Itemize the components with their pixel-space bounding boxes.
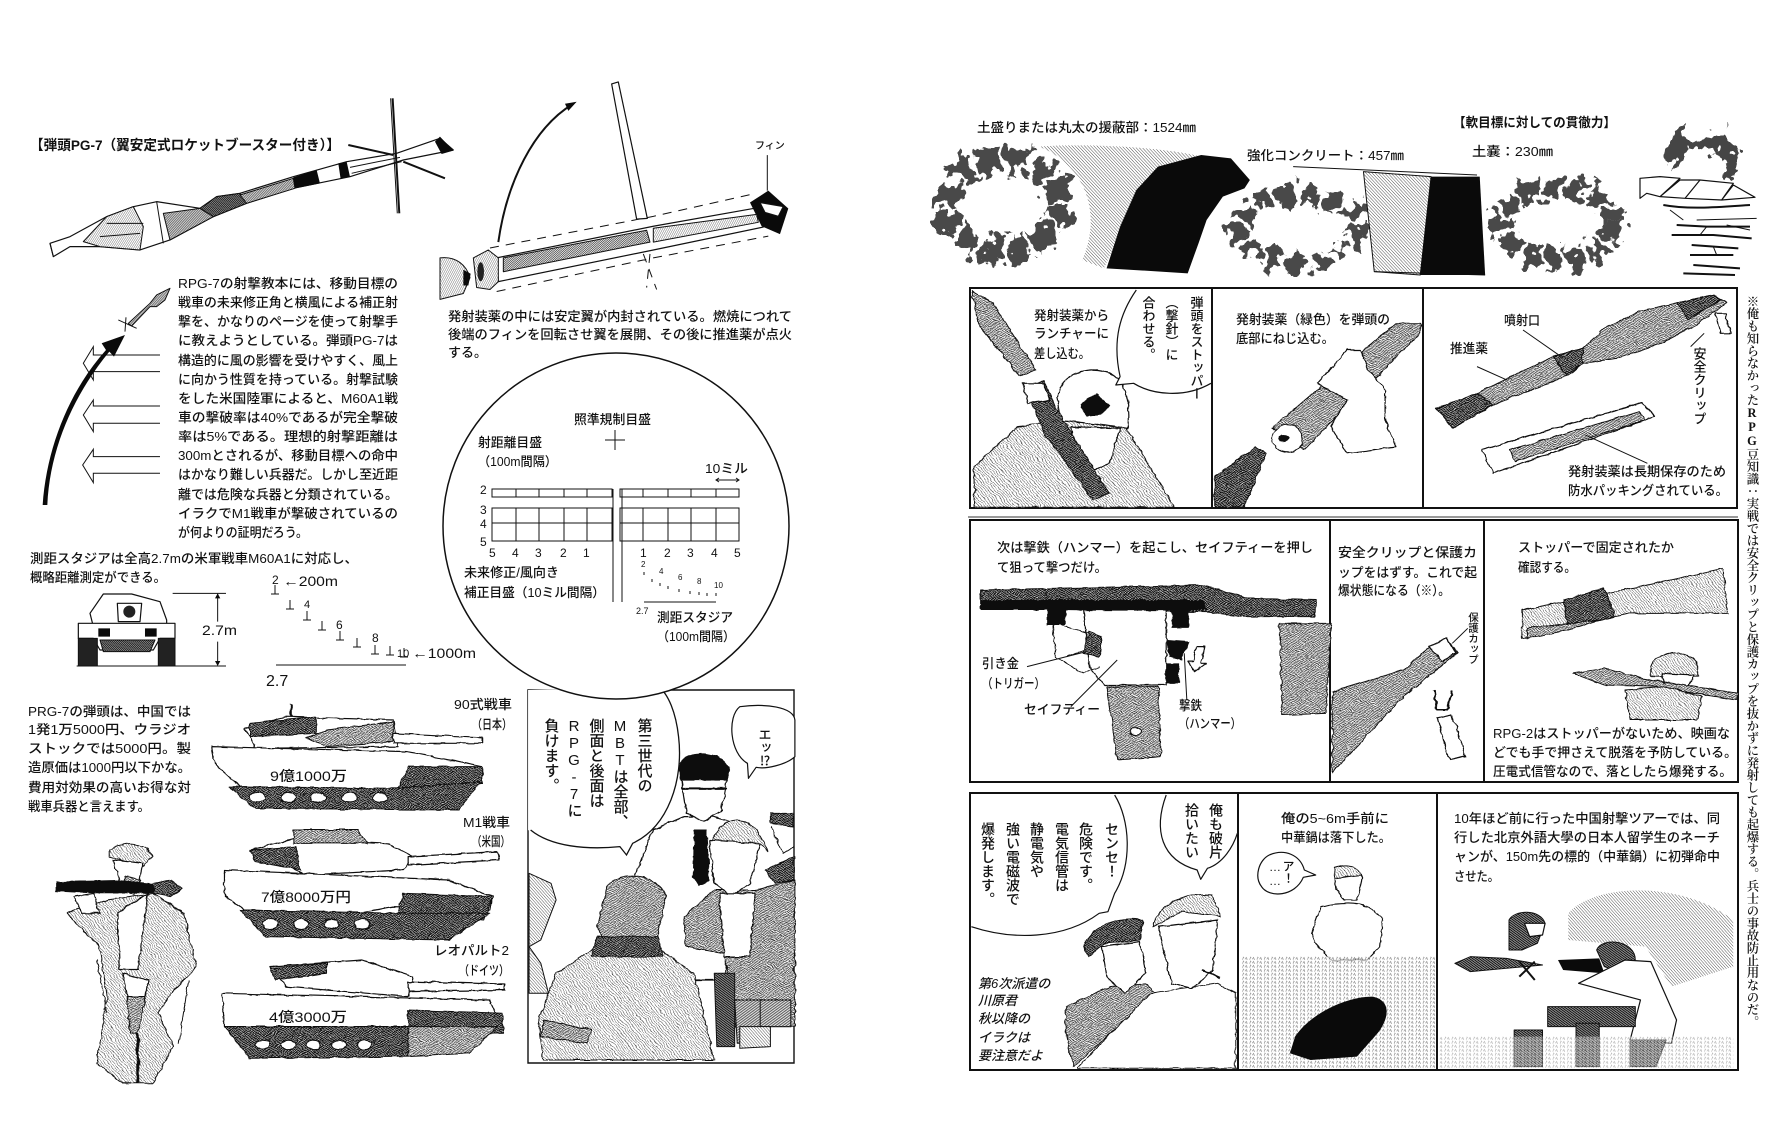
caption: wok fell: 俺の5~6m手前に	[1281, 811, 1389, 826]
labels: trigger group: （トリガー）	[982, 676, 1045, 691]
caption: shooting tour: ャンが、150m先の標的（中華鍋）に初弾命中	[1454, 849, 1720, 864]
label: Leopard 2: レオパルト2	[434, 943, 509, 958]
objects: bottles on the table	[714, 973, 791, 1048]
text block: propellant	[448, 309, 792, 360]
illustration: Leopard 2 tank	[222, 960, 505, 1058]
handwritten note: イラクは	[978, 1030, 1031, 1045]
caption: insert into launcher: 差し込む。	[1034, 346, 1090, 361]
panel row 3: comic anecdotes	[970, 793, 1738, 1070]
label: M1: M1戦車	[463, 815, 510, 830]
handwritten note: 秋以降の	[978, 1011, 1031, 1026]
chart: reinforced concrete penetration: 強化コンクリート：457㎜	[1247, 148, 1404, 163]
figure: bald man from behind	[538, 876, 714, 1060]
text block: firing manual: 構造的に風の影響を受けやすく、風上	[178, 353, 398, 368]
speech bubble: stopper	[1116, 290, 1211, 393]
diagram: sight reticle: 未来修正/風向き	[464, 565, 559, 580]
caption: screw in propellant: 底部にねじ込む。	[1236, 331, 1334, 346]
figure: soldier loading warhead	[971, 291, 1174, 507]
diagram: sight reticle: 2	[560, 546, 567, 560]
text block: propellant: 後端のフィンを回転させ翼を展開、その後に推進薬が点火	[448, 327, 792, 342]
handwritten note: 川原君	[978, 993, 1019, 1008]
diagram: sight reticle: 10ミル	[705, 461, 748, 476]
diagram: stadia scale	[266, 573, 476, 690]
figure: rocket and propellant sleeve	[1436, 295, 1731, 473]
figure: tube and hand	[1215, 323, 1420, 507]
labels: trigger group: （ハンマー）	[1179, 716, 1241, 731]
diagram: sight reticle: 4	[512, 546, 519, 560]
labels: trigger group: セイフティー	[1024, 702, 1100, 717]
figure: man in grass	[1312, 866, 1383, 960]
bubble text: fragment: 俺も破片	[1208, 803, 1224, 860]
label: Type 90: 90式戦車	[454, 697, 512, 712]
illustration: fighter with RPG	[56, 844, 196, 1083]
figure: man with glasses	[635, 753, 745, 980]
caption: waterproof packing: 防水パッキングされている。	[1568, 483, 1728, 498]
text block: stadia explanation	[30, 551, 358, 585]
diagram: sight reticle: 補正目盛（10ミル間隔）	[464, 585, 605, 600]
text block: stadia explanation: 測距スタジアは全高2.7mの米軍戦車M60A1に対応し、	[30, 551, 358, 566]
caption: wok fell: 中華鍋は落下した。	[1281, 830, 1391, 845]
side note: vertical trivia: ※俺も知らなかったRPG豆知識：実戦では安全クリップと保護カップを抜かずに発射しても起爆する。兵士の事故防止用なのだ。	[1745, 295, 1760, 1028]
diagram: sight reticle: 5	[480, 535, 487, 549]
diagram: sight reticle: 1	[640, 546, 647, 560]
bubble text: third-generation MBT: 負けます。	[542, 718, 560, 793]
text block: warhead price: 戦車兵器と言えます。	[28, 799, 150, 814]
chart: earth berm penetration	[947, 120, 1250, 273]
text block: firing manual: が何よりの証明だろう。	[178, 525, 308, 540]
text block: firing manual: 撃を、かなりのページを使って射撃手	[178, 314, 398, 329]
bubble text: danger warning: 危険です。	[1078, 822, 1094, 892]
speech bubble: ah	[1258, 852, 1316, 894]
text block: warhead price: PRG-7の弾頭は、中国では	[28, 704, 191, 719]
label: tank height: 2.7m	[202, 622, 237, 638]
caption: screw in propellant: 発射装薬（緑色）を弾頭の	[1236, 312, 1390, 327]
chart: reinforced concrete penetration	[1238, 148, 1485, 275]
labels: rocket parts: 推進薬	[1450, 341, 1488, 356]
label: Leopard 2 price: 4億3000万	[269, 1009, 347, 1025]
bubble text: fragment: 拾いたい	[1184, 803, 1200, 859]
caption: waterproof packing	[1568, 464, 1728, 498]
caption: remove clip and cap: 爆状態になる（※）。	[1338, 583, 1450, 598]
caption: cock hammer	[997, 540, 1313, 575]
label: Type 90 price: 9億1000万	[270, 768, 347, 784]
bubble text: align with stopper: （撃針）に	[1164, 296, 1178, 361]
text block: firing manual: 離では危険な兵器と分類されている。	[178, 487, 398, 502]
speech bubble: want a fragment	[1160, 795, 1237, 879]
label: Leopard 2	[434, 943, 509, 978]
diagram: sight reticle: 8	[697, 577, 702, 586]
diagram: sight reticle: 6	[678, 573, 683, 582]
handwritten note	[978, 976, 1051, 1063]
illustration: propellant tube and fins	[440, 82, 788, 299]
bubble text: third-generation MBT: 側面と後面は	[588, 718, 604, 808]
figures: two men	[1066, 895, 1236, 1068]
bubble text: danger warning	[980, 821, 1120, 906]
illustration: M1 tank	[224, 830, 499, 940]
text block: firing manual: RPG-7の射撃教本には、移動目標の	[178, 276, 398, 291]
label: M1: （米国）	[472, 834, 510, 849]
diagram: sight reticle: 2.7	[636, 606, 649, 616]
caption: confirm stopper: ストッパーで固定されたか	[1518, 540, 1674, 555]
chart: sandbag penetration	[1472, 125, 1757, 275]
illustration: PG-7 rocket	[50, 98, 453, 257]
caption: cock hammer: 次は撃鉄（ハンマー）を起こし、セイフティーを押し	[997, 540, 1313, 555]
caption: RPG-2 note: RPG-2はストッパーがないため、映画な	[1493, 726, 1730, 741]
bubble text: third-generation MBT	[542, 717, 652, 829]
illustration: Type 90 tank	[212, 703, 482, 810]
caption: screw in propellant	[1236, 312, 1390, 346]
text block: firing manual: をした米国陸軍によると、M60A1戦	[178, 391, 398, 406]
text block: firing manual: はかなり難しい兵器だ。しかし至近距	[178, 467, 398, 482]
text block: stadia explanation: 概略距離測定ができる。	[30, 570, 166, 585]
diagram: sight reticle: 射距離目盛	[478, 435, 542, 450]
diagram: sight reticle: （100m間隔）	[657, 629, 735, 644]
diagram: stadia scale: ←1000m	[412, 645, 476, 661]
illustration: propellant tube and fins: フィン	[755, 140, 785, 152]
bubble text: third-generation MBT: RPG-7に	[566, 718, 582, 818]
heading: soft target penetration: 【軟目標に対しての貫徹力】	[1453, 115, 1616, 130]
labels: rocket parts	[1450, 313, 1706, 425]
speech bubble: surprise	[732, 705, 795, 778]
text block: warhead price: 費用対効果の高いお得な対	[28, 780, 191, 795]
diagram: stadia scale: 6	[336, 618, 343, 632]
caption: insert into launcher	[1034, 308, 1109, 361]
text block: warhead price: 造原価は1000円以下かな。	[28, 760, 191, 775]
diagram: sight reticle: 3	[687, 546, 694, 560]
text block: firing manual: 戦車の未来修正角と横風による補正射	[178, 295, 398, 310]
caption: shooting tour: 10年ほど前に行った中国射撃ツアーでは、同	[1454, 811, 1720, 826]
diagram: stadia scale: ←200m	[283, 573, 338, 589]
label: protective cap: 保護カップ	[1467, 611, 1479, 664]
text block: propellant: 発射装薬の中には安定翼が内封されている。燃焼につれて	[448, 309, 792, 324]
illustration: stopper check and soldier	[1522, 568, 1738, 720]
text block: warhead price: ストックでは5000円。製	[28, 741, 191, 756]
label: Leopard 2: （ドイツ）	[459, 963, 509, 978]
diagram: stadia scale: 8	[372, 631, 379, 645]
bubble text: fragment	[1184, 803, 1224, 860]
bubble text: align with stopper	[1140, 295, 1204, 400]
handwritten note: 要注意だよ	[978, 1048, 1043, 1063]
caption: shooting tour: させた。	[1454, 869, 1499, 884]
text block: firing manual: に向かう性質を持っている。射撃試験	[178, 372, 398, 387]
illustration: trigger group	[981, 585, 1331, 760]
diagram: sight reticle: 3	[535, 546, 542, 560]
text block: firing manual: イラクでM1戦車が撃破されているの	[178, 506, 398, 521]
labels: trigger group: 引き金	[982, 656, 1019, 671]
diagram: sight reticle: 5	[489, 546, 496, 560]
caption: wok fell	[1281, 811, 1391, 845]
caption: remove clip and cap	[1338, 545, 1477, 598]
text block: firing manual: 300mとされるが、移動目標への命中	[178, 448, 398, 463]
bubble text: ah: ……	[1268, 860, 1282, 888]
label: M1 price: 7億8000万円	[261, 889, 351, 905]
caption: cock hammer: て狙って撃つだけ。	[997, 560, 1107, 575]
diagram: sight reticle: 照準規制目盛	[574, 412, 651, 427]
figure: man in cap	[684, 813, 795, 1027]
speech bubble: danger warning	[971, 795, 1127, 935]
diagram: sight reticle: 測距スタジア	[657, 610, 733, 625]
caption: RPG-2 note: どでも手で押さえて脱落を予防している。	[1493, 745, 1737, 760]
text block: warhead price: 1発1万5000円、ウラジオ	[28, 722, 191, 737]
bubble text: ah	[1268, 860, 1295, 888]
text block: firing manual: に教えようとしている。弾頭PG-7は	[178, 333, 398, 348]
chart: earth berm penetration: 土盛りまたは丸太の援蔽部：1524㎜	[977, 120, 1196, 135]
chart: sandbag penetration: 土嚢：230㎜	[1472, 144, 1553, 159]
diagram: stadia scale: 2	[272, 573, 279, 587]
caption: remove clip and cap: ップをはずす。これで起	[1338, 565, 1477, 580]
text block: firing manual: 車の撃破率は40%であるが完全撃破	[178, 410, 398, 425]
illustration: M60A1 tank with height	[77, 593, 226, 666]
diagram: sight reticle: 2	[641, 560, 646, 569]
illustration: sandbag wall	[1640, 177, 1757, 275]
caption: insert into launcher: ランチャーに	[1034, 326, 1109, 341]
diagram: sight reticle: 2	[480, 483, 487, 497]
bubble text: align with stopper: 弾頭をストッパー	[1188, 295, 1204, 400]
bubble text: third-generation MBT: MBTは全部、	[612, 718, 628, 829]
caption: waterproof packing: 発射装薬は長期保存のため	[1568, 464, 1726, 479]
bubble text: danger warning: 強い電磁波で	[1005, 822, 1021, 906]
diagram: stadia scale: 10	[397, 648, 409, 660]
illustration: protective cap	[1332, 638, 1465, 773]
bubble text: ah: ア！	[1281, 860, 1295, 884]
panel row 2: firing steps	[968, 516, 1738, 782]
labels: rocket parts: 安全クリップ	[1692, 346, 1706, 425]
caption: insert into launcher: 発射装薬から	[1034, 308, 1109, 323]
labels: rocket parts: 噴射口	[1504, 313, 1540, 328]
diagram: sight reticle: 4	[480, 517, 487, 531]
bubble text: danger warning: センセ！	[1104, 822, 1120, 878]
diagram: sight reticle: 4	[659, 567, 664, 576]
bubble text: surprise: エッ⁉	[756, 728, 772, 767]
diagram: stadia scale: 4	[304, 599, 310, 611]
bubble text: danger warning: 電気信管は	[1054, 822, 1070, 892]
heading: warhead PG-7: 【弾頭PG-7（翼安定式ロケットブースター付き）】	[30, 137, 340, 153]
diagram: sight reticle	[443, 353, 789, 699]
panel row 1: loading steps	[970, 288, 1737, 508]
bubble text: align with stopper: 合わせる。	[1140, 296, 1156, 361]
labels: trigger group	[982, 656, 1241, 731]
diagram: stadia scale: 2.7	[266, 673, 288, 690]
caption: shooting tour: 行した北京外語大學の日本人留学生のネーチ	[1454, 830, 1720, 845]
speech bubble: third-generation MBT	[528, 687, 680, 855]
diagram: sight reticle: 5	[734, 546, 741, 560]
diagram: sight reticle: 2	[664, 546, 671, 560]
bubble text: danger warning: 爆発します。	[980, 822, 996, 906]
panel: comic, MBT conversation	[528, 687, 795, 1063]
diagram: sight reticle: 3	[480, 503, 487, 517]
diagram: sight reticle: 10	[714, 581, 723, 590]
label: Type 90: （日本）	[472, 717, 512, 732]
caption: confirm stopper	[1518, 540, 1674, 575]
figure: left onlooker	[529, 873, 556, 993]
diagram: sight reticle: 4	[711, 546, 718, 560]
diagram: sight reticle: 1	[583, 546, 590, 560]
caption: shooting tour	[1454, 811, 1720, 884]
text block: firing manual: 率は5%である。理想的射撃距離は	[178, 429, 398, 444]
bubble text: danger warning: 静電気や	[1029, 821, 1045, 878]
text block: warhead price	[28, 704, 191, 814]
caption: confirm stopper: 確認する。	[1518, 560, 1576, 575]
diagram: crosswind effect on trajectory	[43, 288, 170, 505]
label: M1	[463, 815, 510, 849]
bubble text: third-generation MBT: 第三世代の	[636, 717, 652, 793]
caption: RPG-2 note: 圧電式信管なので、落としたら爆発する。	[1493, 764, 1732, 779]
text block: propellant: する。	[448, 345, 487, 360]
handwritten note: 第6次派遣の	[978, 976, 1051, 991]
labels: trigger group: 撃鉄	[1179, 698, 1202, 713]
label: Type 90	[454, 697, 512, 732]
diagram: sight reticle: （100m間隔）	[478, 454, 557, 469]
caption: RPG-2 note	[1493, 726, 1737, 779]
text block: firing manual	[178, 276, 398, 540]
caption: remove clip and cap: 安全クリップと保護カ	[1338, 545, 1477, 560]
figure: shooter and rocket	[1439, 890, 1733, 1068]
